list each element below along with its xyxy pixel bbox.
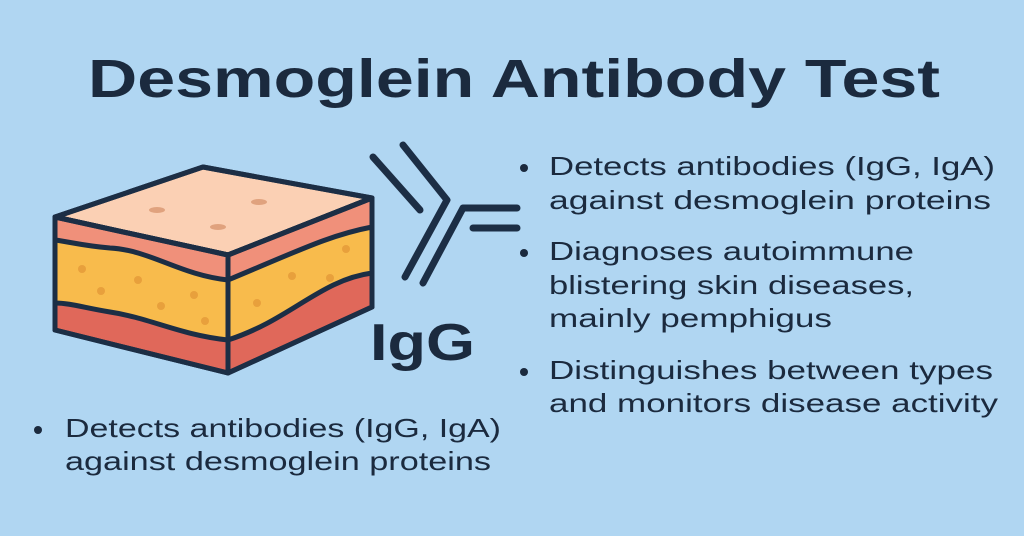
bullet list: right: Distinguishes between types [549, 355, 993, 385]
bullet list: right: blistering skin diseases, [549, 270, 914, 300]
bullet list: left [34, 413, 501, 476]
bullet list: right: Detects antibodies (IgG, IgA) [549, 151, 995, 181]
label: IgG: IgG [370, 314, 475, 372]
icon: skin layers cube [55, 167, 372, 373]
bullet list: right: mainly pemphigus [549, 303, 832, 333]
title: Desmoglein Antibody Test [88, 49, 940, 109]
icon: antibody [373, 145, 517, 283]
bullet list: left: Detects antibodies (IgG, IgA) [65, 413, 501, 443]
bullet list: right [520, 151, 998, 418]
bullet list: right: against desmoglein proteins [549, 185, 991, 215]
bullet list: right: and monitors disease activity [549, 388, 998, 418]
bullet list: left: against desmoglein proteins [65, 446, 491, 476]
bullet list: right: Diagnoses autoimmune [549, 236, 914, 266]
